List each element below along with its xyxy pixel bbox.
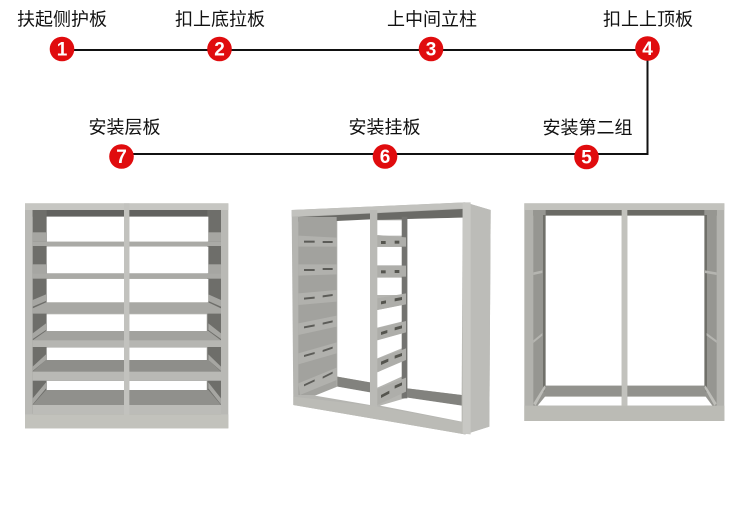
step 3: 3 [426, 40, 436, 60]
step 7: 安装层板 [88, 118, 160, 138]
step 6 [348, 118, 420, 169]
step 5: 安装第二组 [542, 118, 632, 138]
step 2: 2 [214, 40, 225, 60]
step 1: 1 [57, 40, 68, 60]
step 3: 上中间立柱 [387, 10, 477, 30]
step 5 [542, 118, 632, 169]
step 1: 扶起侧护板 [17, 10, 107, 30]
step 6: 安装挂板 [348, 118, 420, 138]
step 7: 7 [116, 147, 127, 168]
step 3 [387, 10, 477, 61]
photo: completed shelf with layer boards [25, 203, 228, 428]
step 4: 扣上上顶板 [603, 10, 693, 30]
step 4: 4 [642, 39, 653, 60]
step 2 [175, 10, 265, 61]
step 4 [603, 10, 693, 61]
step 2: 扣上底拉板 [175, 10, 265, 30]
photo: frame with hanger plates [292, 202, 491, 434]
photo: assembled frame without boards [524, 203, 724, 421]
step 6: 6 [380, 147, 390, 168]
step 5: 5 [581, 148, 592, 168]
connector line between steps [62, 50, 648, 154]
step 1 [17, 10, 107, 61]
step 7 [88, 118, 160, 169]
